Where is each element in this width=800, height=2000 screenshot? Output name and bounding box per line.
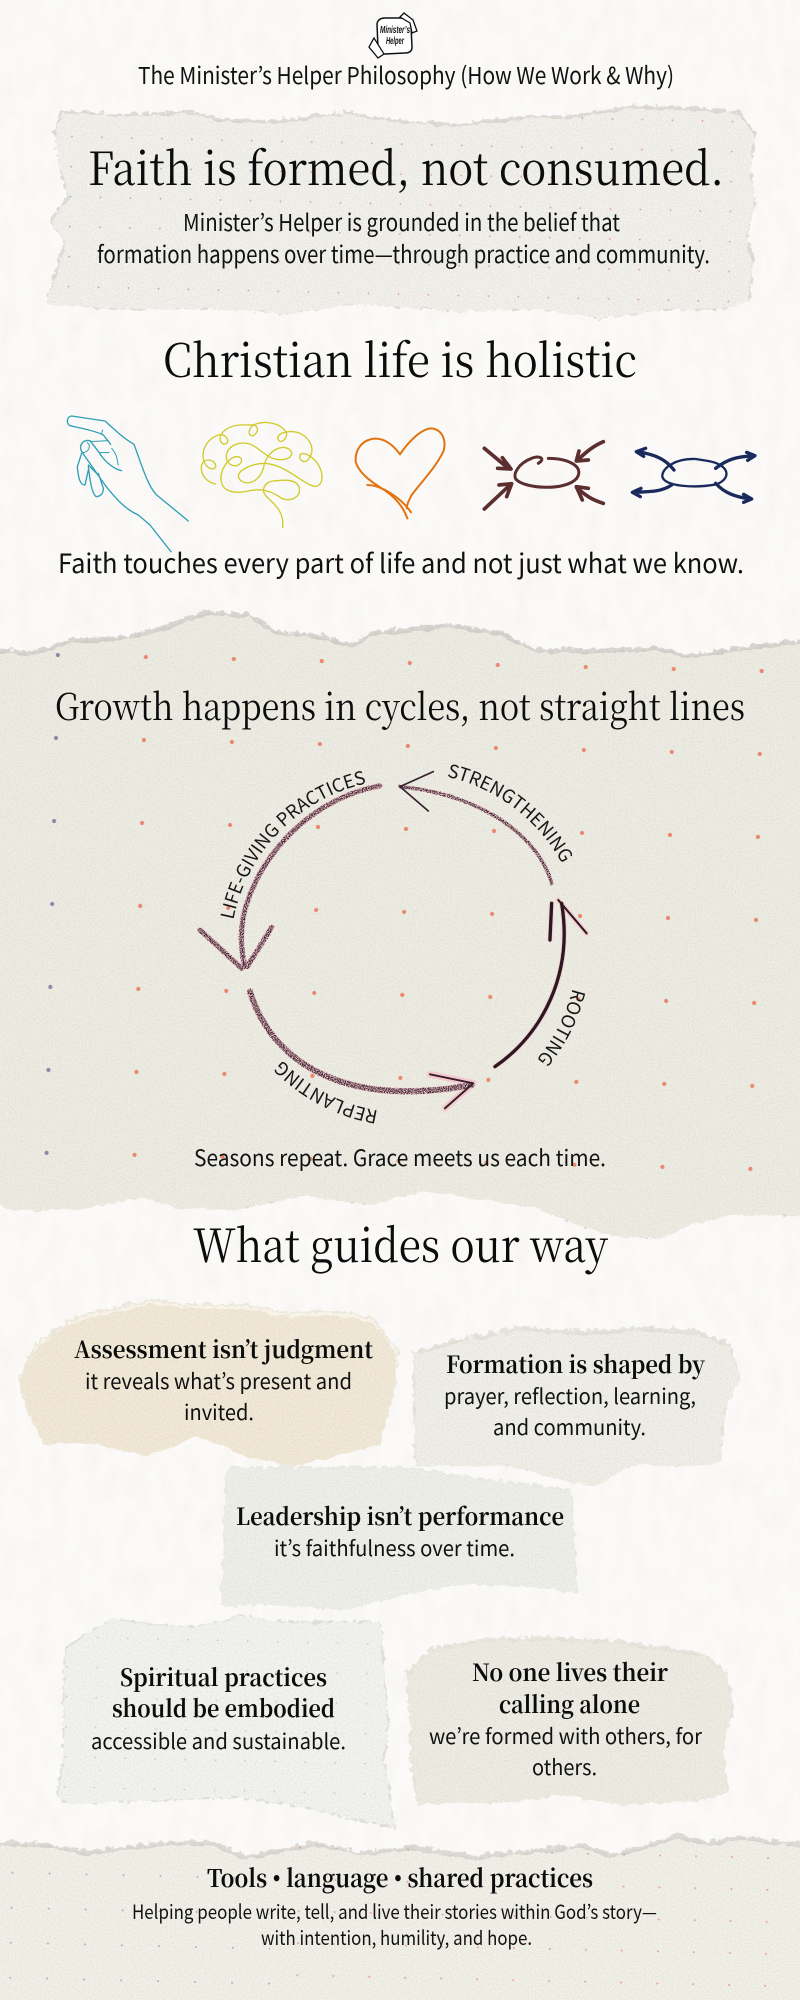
heading: Christian life is holistic: Christian life is holistic	[163, 325, 637, 391]
hero heading: Faith is formed, not consumed.	[88, 133, 724, 199]
card: leadership	[222, 1468, 577, 1609]
arrow: strengthening	[400, 772, 552, 883]
card: spiritual practices	[57, 1615, 397, 1830]
label: rooting: ROOTING	[538, 990, 586, 1066]
card heading: Spiritual practices	[120, 1659, 327, 1693]
card heading	[112, 1659, 335, 1724]
card body: it’s faithfulness over time.	[274, 1532, 515, 1563]
card heading: calling alone	[499, 1686, 640, 1720]
label: replanting: REPLANTING	[274, 1062, 376, 1124]
heading: what guides our way: What guides our way	[193, 1210, 609, 1276]
arrow: rooting	[495, 900, 587, 1067]
panel: footer torn paper	[0, 1836, 800, 2000]
footer body	[132, 1896, 657, 1951]
arrow: life-giving practices	[200, 786, 380, 968]
card body	[429, 1720, 703, 1782]
footer body: Helping people write, tell, and live their stories within God’s story—	[132, 1896, 657, 1925]
card heading: should be embodied	[112, 1690, 335, 1724]
label: life-giving practices: LIFE-GIVING PRACTICES	[220, 771, 365, 918]
icon: arrows inward	[484, 442, 603, 509]
card heading: Formation is shaped by	[446, 1346, 705, 1380]
card body: prayer, reflection, learning,	[444, 1380, 696, 1411]
logo: Helper	[386, 36, 405, 47]
card: formation	[414, 1328, 739, 1486]
icon: brain	[201, 422, 322, 528]
card body	[85, 1365, 352, 1427]
card heading	[472, 1654, 668, 1720]
logo	[369, 13, 417, 58]
arrow: replanting	[250, 992, 473, 1108]
card heading: Assessment isn’t judgment	[74, 1331, 374, 1365]
card: assessment	[19, 1300, 397, 1467]
label: strengthening: STRENGTHENING	[448, 764, 572, 862]
card heading: No one lives their	[472, 1654, 668, 1688]
icon: heart	[356, 428, 445, 518]
card body: and community.	[493, 1411, 646, 1442]
caption: seasons repeat: Seasons repeat. Grace meets us each time.	[194, 1141, 606, 1173]
footer heading: Tools • language • shared practices	[207, 1860, 593, 1895]
icon: arrows outward	[632, 448, 755, 502]
cycle diagram	[197, 764, 589, 1124]
panel: cycles torn paper	[0, 610, 800, 1240]
card body: it reveals what’s present and	[85, 1365, 352, 1396]
card body	[444, 1380, 696, 1442]
hero body text: Minister’s Helper is grounded in the belief that	[183, 204, 620, 238]
hero body text: formation happens over time—through practice and community.	[97, 236, 710, 270]
card body: accessible and sustainable.	[91, 1725, 346, 1756]
card heading: Leadership isn’t performance	[236, 1498, 564, 1532]
card: no one lives alone	[408, 1638, 732, 1805]
panel: hero torn paper	[48, 105, 758, 320]
logo: Minister’s	[380, 25, 410, 36]
card body: others.	[532, 1751, 597, 1782]
caption: faith touches: Faith touches every part of life and not just what we know.	[58, 542, 744, 581]
hero body text	[97, 204, 710, 270]
card body: invited.	[184, 1396, 254, 1427]
icon: hand	[67, 416, 188, 552]
page title: The Minister’s Helper Philosophy (How We Work & Why)	[138, 57, 674, 91]
card body: we’re formed with others, for	[429, 1720, 703, 1751]
footer body: with intention, humility, and hope.	[261, 1922, 532, 1951]
